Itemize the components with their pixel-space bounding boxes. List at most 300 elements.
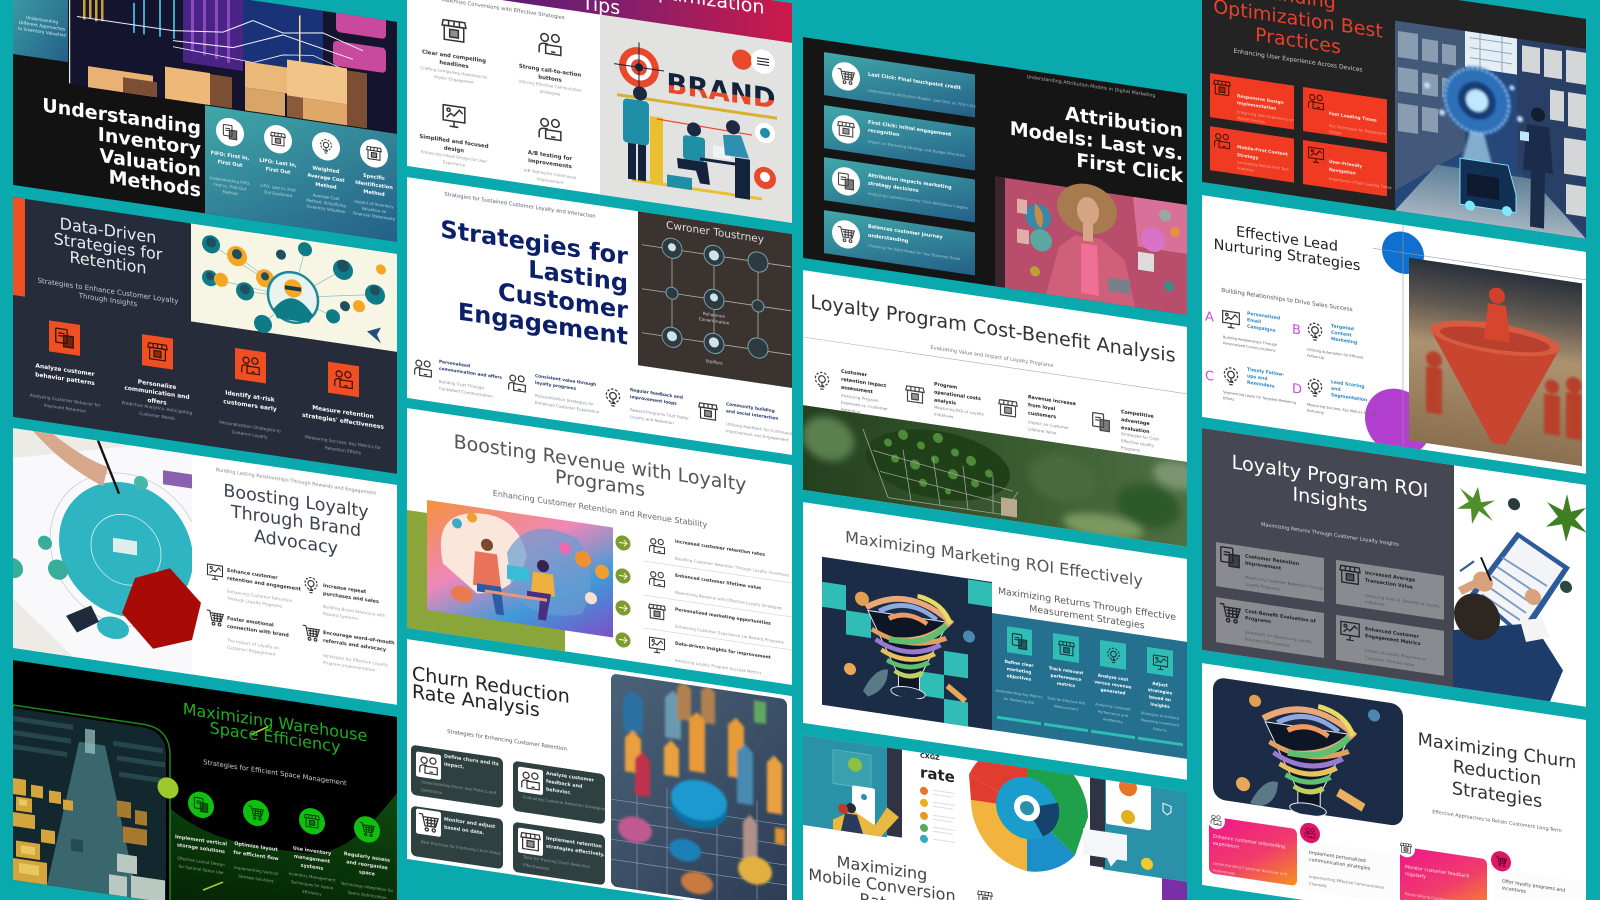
slide: Maximizing Warehouse Space Efficiency — [13, 660, 397, 900]
method: LIFO: LIFO: Last In, — [259, 157, 297, 169]
item D: Lead Scoring — [1331, 379, 1365, 390]
subtitle: Building Lasting Relationships Through Rewards and Engagement — [216, 467, 376, 497]
tip: A/B testing — [524, 115, 576, 187]
step: identify: Identify at-risk — [225, 389, 276, 404]
green swoosh — [170, 759, 397, 900]
tip: design: Experience — [443, 159, 466, 168]
step: inventory systems: Techniques for Space — [290, 879, 334, 890]
slide: Maximizing Churn Reduction Strategies — [1202, 663, 1586, 900]
item: personalized communication: Building Trust Through — [439, 379, 484, 390]
step: cost vs revenue — [1091, 639, 1135, 739]
card: last click: Understanding Attribution Models: Last Click vs. First Click — [868, 89, 977, 109]
step: personalize — [122, 331, 193, 425]
step: vertical storage: Effective Layout Design — [177, 855, 225, 867]
method: FIFO: FIFO: First In, — [211, 150, 249, 162]
item C: ups and — [1247, 373, 1268, 382]
card: responsive design: Implementation — [1237, 100, 1276, 112]
decorative magenta circle — [1365, 384, 1431, 460]
method: specific identification — [353, 136, 395, 222]
image: customer journey board: Stpillyrs — [706, 358, 722, 366]
tip: A/B testing: Improvement — [537, 176, 564, 185]
card: transaction value: Increased Average — [1365, 570, 1416, 584]
method: LIFO: LIFO: Last In, First — [260, 183, 296, 193]
step: inventory systems: management — [294, 854, 331, 865]
card: customer journey: understanding — [868, 233, 909, 245]
card: engagement metrics: Impact of Loyalty Programs on — [1365, 648, 1427, 662]
card: analyze feedback: feedback and — [546, 779, 583, 790]
step: optimize layout: Implementing Vertical — [234, 865, 278, 876]
item: retention impact — [815, 365, 888, 419]
step: adjust — [1138, 646, 1183, 746]
card: mobile first: Analytics — [1237, 166, 1254, 173]
image: customer journey board — [638, 211, 792, 388]
step: identify: Personalization Strategies to — [219, 420, 281, 435]
panel: subtitle block: Understanding — [26, 15, 58, 26]
title: Maximizing Warehouse — [183, 699, 367, 745]
card: feedback: regularly — [1405, 871, 1426, 880]
tip: call to action: Utilizing Effective Call-to-Action — [519, 79, 582, 93]
step: reassess: space — [359, 869, 376, 878]
step: vertical storage — [175, 788, 227, 876]
item: competitive advantage: advantage — [1121, 417, 1150, 427]
step: metrics — [1044, 632, 1088, 732]
step: identify: customers early — [223, 398, 277, 413]
item A: Personalized — [1247, 311, 1280, 322]
step: personalize: Personalize — [138, 378, 176, 391]
image: customer network — [191, 223, 397, 353]
icon: store — [978, 891, 992, 900]
step: reassess: Space Optimization — [348, 890, 387, 900]
item: word of mouth — [303, 625, 395, 676]
slide: Maximizing Mobile Conversion Rates — [803, 712, 1187, 900]
item: repeat purchases: Increase repeat — [323, 583, 367, 595]
step: personalize: Customer Needs — [139, 411, 176, 422]
title: Understanding — [42, 93, 201, 140]
subtitle: Enhancing User Experience Across Devices — [1233, 48, 1363, 74]
card: navigation: User-Friendly — [1329, 159, 1362, 170]
image: customer journey board: Cwroner Toustrney — [666, 219, 764, 246]
item: word of mouth: referrals and advocacy — [323, 638, 387, 653]
tip: headlines — [420, 16, 488, 87]
item A: Building Relationships Through — [1223, 335, 1277, 347]
title: Advocacy — [254, 527, 338, 559]
item: emotional connection: connection with brand — [227, 624, 289, 639]
title: Maximizing Marketing ROI Effectively — [845, 527, 1143, 590]
item: repeat purchases: purchases and sales — [323, 591, 379, 605]
card: mobile first: Strategy — [1237, 152, 1259, 161]
card: last click: Last Click: Final touchpoint credit — [868, 72, 962, 91]
step: inventory systems — [289, 805, 336, 899]
title: Methods — [109, 165, 201, 202]
step: optimize layout: Optimize layout — [234, 841, 278, 853]
item C: Timely Follow- — [1247, 367, 1284, 378]
item B: B — [1292, 322, 1301, 339]
item: retention impact: Analyzing Program — [841, 393, 879, 403]
item: operational costs: Program — [934, 381, 957, 391]
item D: and — [1331, 386, 1341, 393]
image: red funnel and figures — [1409, 258, 1582, 466]
step: optimize layout: for efficient flow — [233, 850, 279, 862]
tip: design: Enhancing Visual Design for User — [421, 149, 488, 164]
title: Rate Analysis — [412, 680, 540, 722]
item: community building: Utilizing Feedback for Continuous — [726, 421, 793, 436]
image: warehouse aisle — [13, 705, 170, 900]
benefit: lifetime value — [616, 564, 782, 611]
tip: A/B testing: A/B Testing for Continuous — [524, 167, 576, 180]
card: analyze feedback — [513, 761, 605, 824]
card: responsive design: Mobile Devices — [1237, 116, 1265, 124]
item: retention impact: Customer — [841, 369, 868, 379]
item A: A — [1205, 310, 1214, 326]
card: define churn — [411, 745, 503, 808]
step: personalize: Predictive Analytics: Anticipating — [122, 400, 193, 417]
title: Insights — [1292, 482, 1368, 516]
card: monitor data — [411, 806, 503, 869]
panel: subtitle block: to Inventory Valuation — [18, 26, 66, 39]
benefit: retention rates: Increased customer retention rates — [675, 539, 765, 558]
step: adjust: strategies — [1148, 687, 1173, 697]
step: cost vs revenue: Analyze cost — [1098, 673, 1128, 683]
step: adjust: Marketing Investment — [1141, 718, 1180, 728]
item D: D — [1292, 381, 1302, 398]
item: operational costs: Initiatives — [934, 411, 954, 419]
step: objectives: objectives — [1007, 673, 1032, 683]
card: responsive design: Enhancing User Experience on — [1237, 110, 1294, 123]
slide: Maximizing Marketing ROI Effectively — [803, 502, 1187, 780]
card: customer journey — [824, 210, 975, 275]
accent block — [1162, 878, 1187, 900]
step: reassess — [340, 812, 394, 900]
method: weighted average: Average Cost — [313, 192, 340, 201]
title: Lasting — [528, 255, 628, 298]
subtitle: Evaluating Value and Impact of Loyalty Programs — [931, 345, 1054, 369]
item: emotional connection: Foster emotional — [227, 616, 274, 629]
title: Reduction — [1453, 756, 1541, 790]
card: feedback: Monitor customer feedback — [1405, 864, 1470, 880]
image: loyalty planning paper — [13, 428, 192, 674]
image: colorful funnel — [822, 557, 992, 730]
step: vertical storage: Implement vertical — [175, 834, 227, 848]
step: inventory systems: Efficiency — [302, 889, 322, 897]
card: engagement metrics: Customer Lifetime Value — [1365, 655, 1415, 667]
card: loading times: Design — [1329, 130, 1342, 136]
subtitle: Measurement Strategies — [1029, 604, 1145, 632]
card: feedback — [1397, 838, 1487, 900]
panel: valuation methods — [205, 105, 397, 242]
item: regular feedback — [606, 384, 689, 428]
benefit: retention rates — [616, 530, 789, 578]
step: identify: Enhance Loyalty — [232, 429, 268, 441]
step: vertical storage: for Optimal Space Use — [179, 864, 224, 875]
item: repeat purchases — [305, 577, 386, 625]
image: conversion rate dashboard — [803, 712, 1187, 895]
item B: Targeted — [1331, 323, 1354, 332]
method: weighted average — [306, 129, 346, 214]
panel: subtitle block: Different Approaches — [19, 20, 66, 33]
item: community building — [699, 397, 793, 443]
accent bar — [13, 197, 25, 297]
card: loading times — [1303, 87, 1387, 143]
card: communication: Implementing Effective Communication — [1309, 874, 1385, 890]
step: optimize layout — [233, 797, 279, 884]
card: last click — [824, 52, 977, 118]
item: repeat purchases: Building Brand Advocacy with — [323, 604, 386, 618]
slide: Understanding Inventory Valuation Methods — [13, 0, 397, 242]
card: loading times: Fast Loading Times — [1329, 111, 1377, 124]
item: retention impact: retention impact — [841, 377, 887, 389]
item: competitive advantage: Programs — [1121, 445, 1140, 453]
item: emotional connection: Customer Engagement — [227, 645, 276, 657]
card: mobile first: Mobile-First Content — [1237, 144, 1288, 158]
step: cost vs revenue: Performance and — [1098, 710, 1128, 718]
card: monitor data: Best Practices for Improving Churn Rates — [421, 839, 501, 856]
title: Strategies for — [54, 229, 163, 264]
subtitle: Understanding Attribution Models in Digital Marketing — [1027, 74, 1155, 99]
tip: A/B testing: improvements — [528, 158, 572, 170]
subtitle: Strategies for Efficient Space Management — [203, 758, 347, 787]
step: measure: Retention Efforts — [325, 445, 362, 457]
step: adjust: based on — [1149, 694, 1171, 703]
card: attribution impact: Attribution impacts marketing — [868, 173, 952, 191]
step: reassess: Technology Integration for — [340, 880, 394, 893]
method: FIFO: Understanding FIFO: — [210, 175, 250, 186]
item: competitive advantage: Strategies for Cost- — [1121, 431, 1160, 442]
card: cost benefit: Cost-Benefit Evaluation of — [1245, 608, 1316, 625]
item C: Efforts — [1223, 396, 1235, 402]
card: first click — [824, 105, 975, 170]
item: regular feedback: Regular feedback and — [630, 387, 683, 401]
item: personalized communication: Personalized — [439, 359, 470, 369]
card: first click: Impact on Marketing Strategy and Budget Allocation — [868, 140, 966, 158]
title: Maximizing Churn — [1418, 729, 1576, 773]
image: customer journey board: Ruhaninen — [703, 311, 725, 319]
item: word of mouth: Strategies for Effective Loyalty — [323, 653, 388, 668]
item: enhance: retention and engagement — [227, 576, 302, 593]
slide: Churn Reduction Rate Analysis — [407, 639, 792, 900]
item: revenue increase: Lifetime Value — [1028, 426, 1057, 436]
card: implement strategies: Implement retention — [546, 836, 602, 850]
title: Attribution — [1065, 102, 1183, 142]
slide: Mobile Optimization Best Practices — [1202, 0, 1586, 239]
card: attribution impact — [824, 157, 975, 222]
tip: A/B testing: A/B testing for — [528, 150, 572, 162]
card: monitor data: based on data. — [444, 824, 484, 836]
item: competitive advantage: evaluation — [1121, 425, 1150, 435]
card: first click: recognition — [868, 128, 900, 138]
benefit: data insights — [616, 631, 772, 677]
subtitle: Strategies for Sustained Customer Loyalty and Interaction — [444, 192, 596, 220]
step: inventory systems: Inventory Management — [289, 871, 336, 883]
title: Strategies — [1452, 778, 1542, 812]
card: onboarding: Enhance customer onboarding — [1213, 834, 1285, 850]
card: cost benefit: Strategies for Maximizing Loyalty — [1245, 629, 1312, 644]
card: define churn: Understanding Churn: Key Metrics and — [421, 779, 496, 795]
item C — [1205, 360, 1296, 411]
card: onboarding: experience — [1213, 841, 1239, 850]
card: first click: First Click: Initial engagement — [868, 120, 952, 138]
item: operational costs: Measuring ROI of Loyalty — [934, 404, 985, 417]
item B: Follow-Up — [1307, 354, 1325, 360]
benefit: data insights: Data-driven insights for improvement — [675, 641, 772, 661]
step: measure — [302, 358, 384, 460]
card: implement strategies — [513, 822, 605, 885]
card: incentives — [1491, 850, 1586, 900]
slide: Loyalty Program ROI Insights — [1202, 428, 1587, 707]
title: Models: Last vs. — [1010, 117, 1183, 165]
item: operational costs — [906, 377, 985, 424]
step: reassess: Regularly assess — [344, 851, 390, 864]
title: Boosting Loyalty — [223, 481, 369, 523]
item: consistent value: Enhanced Customer Experience — [535, 400, 599, 414]
benefit: personalized marketing: Personalized marketing opportunities — [675, 607, 771, 627]
tip: headlines: headlines — [439, 60, 469, 70]
step: cost vs revenue: versus revenue — [1094, 679, 1132, 691]
step: objectives: for Marketing ROI — [1004, 697, 1034, 705]
step: measure: Measure retention — [312, 404, 374, 420]
step: personalize: offers — [147, 397, 167, 407]
card: define churn: Definitions — [421, 787, 442, 795]
subtitle: Maximizing Returns Through Customer Loyalty Insights — [1261, 522, 1399, 548]
method: weighted average: Method — [315, 182, 337, 191]
item B: Content — [1331, 330, 1352, 339]
card: responsive design: Responsive Design — [1237, 93, 1284, 106]
title: Effective Lead — [1236, 224, 1338, 255]
slide: Boosting Loyalty Through Brand Advocacy — [3, 427, 397, 705]
method: weighted average: Weighted — [313, 165, 340, 175]
subtitle: Strategies to Enhance Customer Loyalty — [38, 276, 178, 305]
method: FIFO: First Out — [218, 159, 243, 169]
card: engagement metrics — [1336, 615, 1444, 676]
card: analyze feedback: Analyze customer — [546, 771, 595, 784]
step: analyze — [30, 317, 101, 417]
card: attribution impact: strategy decisions — [868, 181, 919, 194]
item: personalized communication: communication and offers — [439, 366, 502, 381]
card: communication — [1300, 822, 1394, 900]
card: transaction value — [1336, 560, 1444, 620]
card: analyze feedback: behavior. — [546, 787, 571, 796]
item A: Personalized Communications — [1223, 341, 1275, 353]
title: Inventory — [98, 123, 202, 161]
subtitle: Building Relationships to Drive Sales Success — [1221, 288, 1353, 313]
step: objectives: Define clear — [1004, 659, 1034, 669]
card: communication: communication strategies — [1309, 857, 1371, 872]
card: onboarding: Understanding Customer Behavior and — [1213, 861, 1288, 877]
item: revenue increase: from loyal — [1028, 402, 1056, 412]
item: operational costs: analysis — [934, 397, 956, 407]
subtitle: Maximizing Returns Through Effective — [998, 586, 1176, 623]
method: LIFO: Out Explained — [264, 189, 293, 198]
method: weighted average: Inventory Valuation — [307, 203, 346, 214]
card: define churn: Define churn and its — [444, 753, 499, 768]
step: reassess: and reorganize — [346, 859, 388, 872]
method: LIFO: First Out — [266, 166, 291, 176]
method: specific identification: Identification — [355, 180, 393, 191]
item: consistent value — [509, 369, 599, 414]
title: Churn Reduction — [412, 662, 570, 708]
card: incentives: incentives — [1502, 885, 1527, 895]
decorative yellow-green marks — [203, 717, 268, 900]
title: Strategies for — [440, 215, 628, 271]
item: repeat purchases: Reward Systems — [323, 611, 358, 621]
method: weighted average: Average Cost — [307, 173, 345, 184]
step: identify — [219, 346, 281, 443]
card: mobile first — [1210, 126, 1294, 183]
item D: Measuring Success: Key Metrics for Lead — [1307, 403, 1378, 417]
donut chart — [969, 737, 1088, 880]
slide: Boosting Revenue with Loyalty Programs — [407, 408, 792, 685]
item: community building: Improvement and Engagement — [726, 428, 789, 443]
step: measure: Measuring Success: Key Metrics for — [305, 434, 381, 451]
card: customer journey: Choosing the Right Model for Your Business Goals — [868, 244, 960, 261]
item: enhance: Enhance customer — [227, 568, 278, 581]
item: emotional connection — [207, 610, 289, 659]
title: First Click — [1076, 149, 1184, 187]
item: retention impact: assessment — [841, 385, 873, 395]
card: transaction value: Analyzing Cost vs. Benefits of Loyalty — [1365, 593, 1441, 609]
card: retention: Loyalty Programs — [1245, 581, 1280, 591]
card: incentives: Offer loyalty programs and — [1502, 878, 1565, 894]
method: specific identification: Impact of Inventory — [354, 199, 394, 209]
method: weighted average: Method: Simplifying — [306, 197, 346, 208]
item: personalized communication: Consistent Communication — [439, 386, 493, 399]
step: objectives — [996, 625, 1043, 725]
step: cost vs revenue: Profitability — [1103, 717, 1123, 724]
image: 3D bars and pie on board — [611, 674, 787, 900]
method: LIFO — [259, 122, 297, 199]
slide: Attribution Models: Last vs. First Click — [803, 37, 1187, 315]
card: retention — [1216, 542, 1325, 602]
card: communication: Implement personalized — [1309, 850, 1366, 864]
step: metrics: Measurement — [1054, 704, 1079, 712]
image: couple at laptop — [427, 500, 613, 637]
tip: design — [419, 101, 489, 171]
item: consistent value: Personalization Strategies for — [535, 393, 594, 407]
tip: design: design — [444, 145, 464, 154]
step: metrics: performance — [1051, 673, 1082, 683]
card: communication: Channels — [1309, 881, 1327, 888]
benefit: personalized marketing: Enhancing Customer Experience via Reward Programs — [675, 624, 784, 645]
slide: Loyalty Program Cost-Benefit Analysis — [802, 270, 1203, 553]
item B: Marketing — [1331, 336, 1357, 346]
image: brand illustration — [600, 15, 792, 223]
title: Programs — [555, 465, 645, 501]
method: FIFO: First In, First Out — [214, 182, 247, 192]
step: adjust: Returns — [1153, 727, 1167, 733]
item: enhance: Through Loyalty Programs — [226, 596, 282, 609]
item C: Reminders — [1247, 380, 1275, 390]
card: define churn: impact. — [444, 761, 464, 770]
green backdrop — [407, 510, 565, 651]
method: specific identification: Financial Statements — [353, 210, 395, 222]
item: revenue increase: Impact on Customer — [1028, 419, 1069, 430]
card: onboarding: Preferences — [1213, 868, 1235, 876]
item: personalized communication — [415, 355, 502, 400]
subtitle: Enhancing Customer Retention and Revenue Stability — [493, 489, 707, 529]
card: implement strategies: strategies effectively. — [546, 844, 605, 858]
item: enhance — [208, 564, 302, 612]
step: inventory systems: Use inventory — [293, 845, 332, 857]
slide: Effective Lead Nurturing Strategies — [1202, 195, 1586, 483]
panel: measurement strategies — [992, 585, 1187, 759]
card: navigation: Importance of Fast Loading Times — [1329, 177, 1392, 190]
step: optimize layout: Storage Solutions — [238, 873, 274, 884]
panel: gray content — [1202, 428, 1454, 687]
card: implement strategies: Tools for Tracking Churn Reduction — [522, 854, 591, 869]
item A: Email — [1247, 317, 1262, 325]
card: retention: Improvement — [1245, 560, 1282, 572]
item: emotional connection: The Impact of Loyalty on — [226, 638, 279, 650]
card: responsive design — [1210, 73, 1294, 130]
